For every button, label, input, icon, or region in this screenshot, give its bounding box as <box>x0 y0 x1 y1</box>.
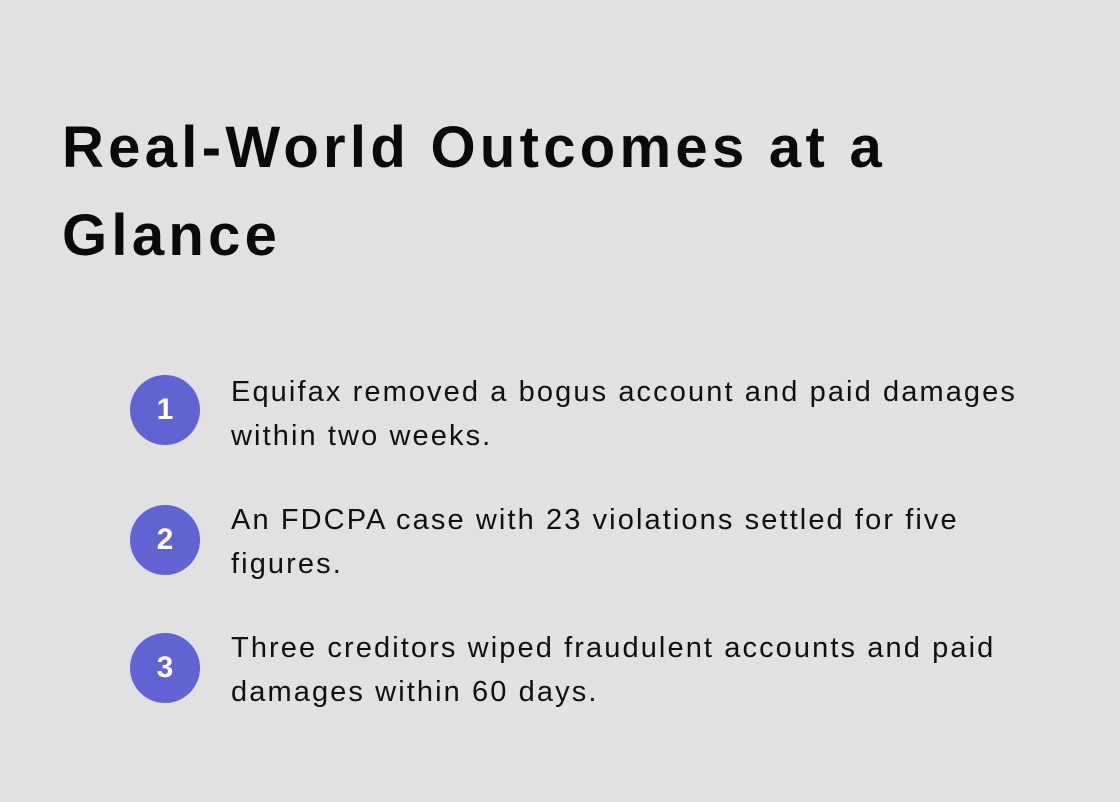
text: item 2 <box>231 504 959 580</box>
text: item 3: Three creditors wiped fraudulent accounts and paid <box>231 632 995 664</box>
text: item 1 <box>231 376 1017 452</box>
text: item 3: damages within 60 days. <box>231 676 598 708</box>
item 1 <box>130 375 1017 452</box>
item 3 <box>130 632 995 708</box>
title: Real-World Outcomes at a <box>62 115 886 180</box>
icon: number 1 circle: 1 <box>157 393 173 426</box>
item 2 <box>130 504 959 580</box>
text: item 1: Equifax removed a bogus account and paid damages <box>231 376 1017 408</box>
text: item 3 <box>231 632 995 708</box>
title <box>62 115 886 268</box>
title: Glance <box>62 203 281 268</box>
icon: number 3 circle: 3 <box>157 651 173 684</box>
icon: number 3 circle <box>130 633 200 703</box>
icon: number 2 circle <box>130 505 200 575</box>
text: item 2: figures. <box>231 548 343 580</box>
icon: number 1 circle <box>130 375 200 445</box>
icon: number 2 circle: 2 <box>157 523 173 556</box>
text: item 2: An FDCPA case with 23 violations settled for five <box>231 504 959 536</box>
text: item 1: within two weeks. <box>231 420 492 452</box>
